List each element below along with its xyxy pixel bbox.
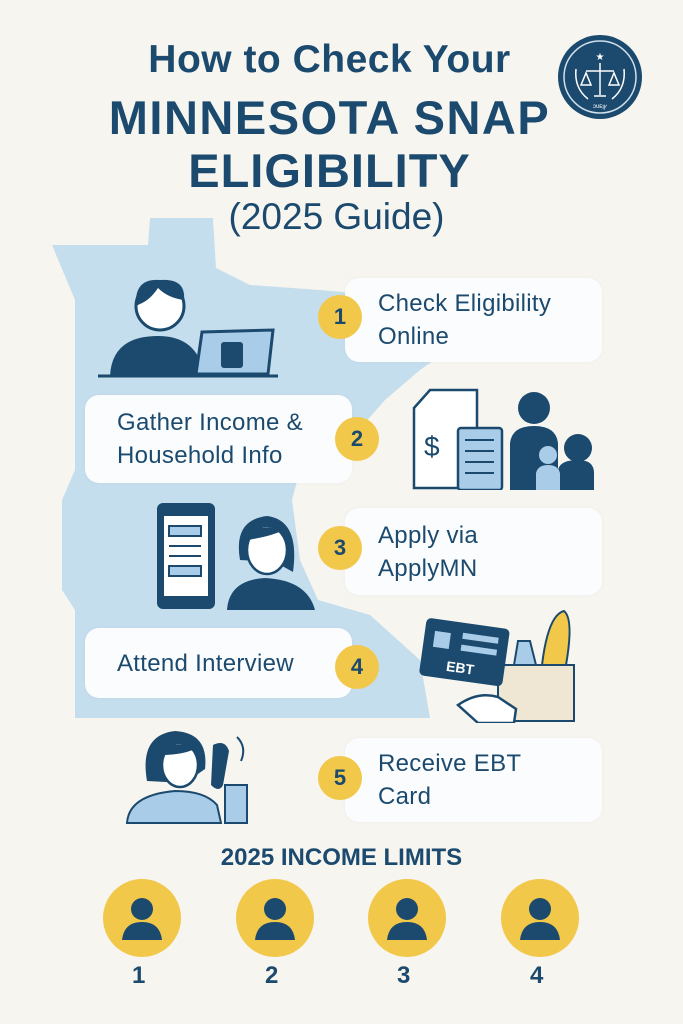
icon: documents and family: $: [424, 431, 440, 462]
step 2: [85, 395, 379, 483]
step 2: Household Info: [117, 442, 283, 469]
step 3: [318, 508, 602, 595]
step 5: Receive EBT: [378, 750, 521, 777]
step 5: Card: [378, 783, 431, 810]
household size icons: 1: [132, 962, 145, 989]
step 4: Attend Interview: [117, 650, 294, 676]
icon: woman on phone: [126, 731, 248, 824]
step 4: [85, 628, 379, 698]
step 1: 1: [334, 304, 346, 329]
icon: seal: ᴐᴜᴇꞁꝩ: [593, 104, 608, 110]
step 1: Online: [378, 323, 449, 350]
step 2: Gather Income &: [117, 409, 303, 436]
icon: EBT card and groceries: [419, 610, 575, 723]
title: How to Check Your: [148, 38, 511, 81]
step 3: ApplyMN: [378, 554, 477, 582]
step 5: [318, 738, 602, 822]
step 5: 5: [334, 765, 346, 790]
icon: documents and family: [412, 388, 594, 490]
title: MINNESOTA SNAP: [109, 91, 550, 144]
household size icons: [103, 879, 579, 989]
title: ELIGIBILITY: [188, 144, 471, 197]
step 3: 3: [334, 535, 346, 560]
icon: seal: [558, 35, 642, 119]
icon: phone and woman: [157, 503, 315, 610]
step 1: Check Eligibility: [378, 290, 551, 317]
household size icons: 4: [530, 962, 543, 989]
heading: income limits: 2025 INCOME LIMITS: [221, 844, 462, 871]
title: [109, 38, 550, 237]
icon: seal: ★: [596, 52, 605, 63]
step 3: Apply via: [378, 522, 478, 548]
step 2: 2: [351, 426, 363, 451]
step 4: 4: [351, 654, 363, 679]
household size icons: 3: [397, 962, 410, 989]
title: (2025 Guide): [229, 196, 444, 237]
icon: EBT card and groceries: EBT: [445, 658, 476, 678]
step 1: [318, 278, 602, 362]
icon: person at laptop: [98, 280, 278, 378]
household size icons: 2: [265, 962, 278, 989]
